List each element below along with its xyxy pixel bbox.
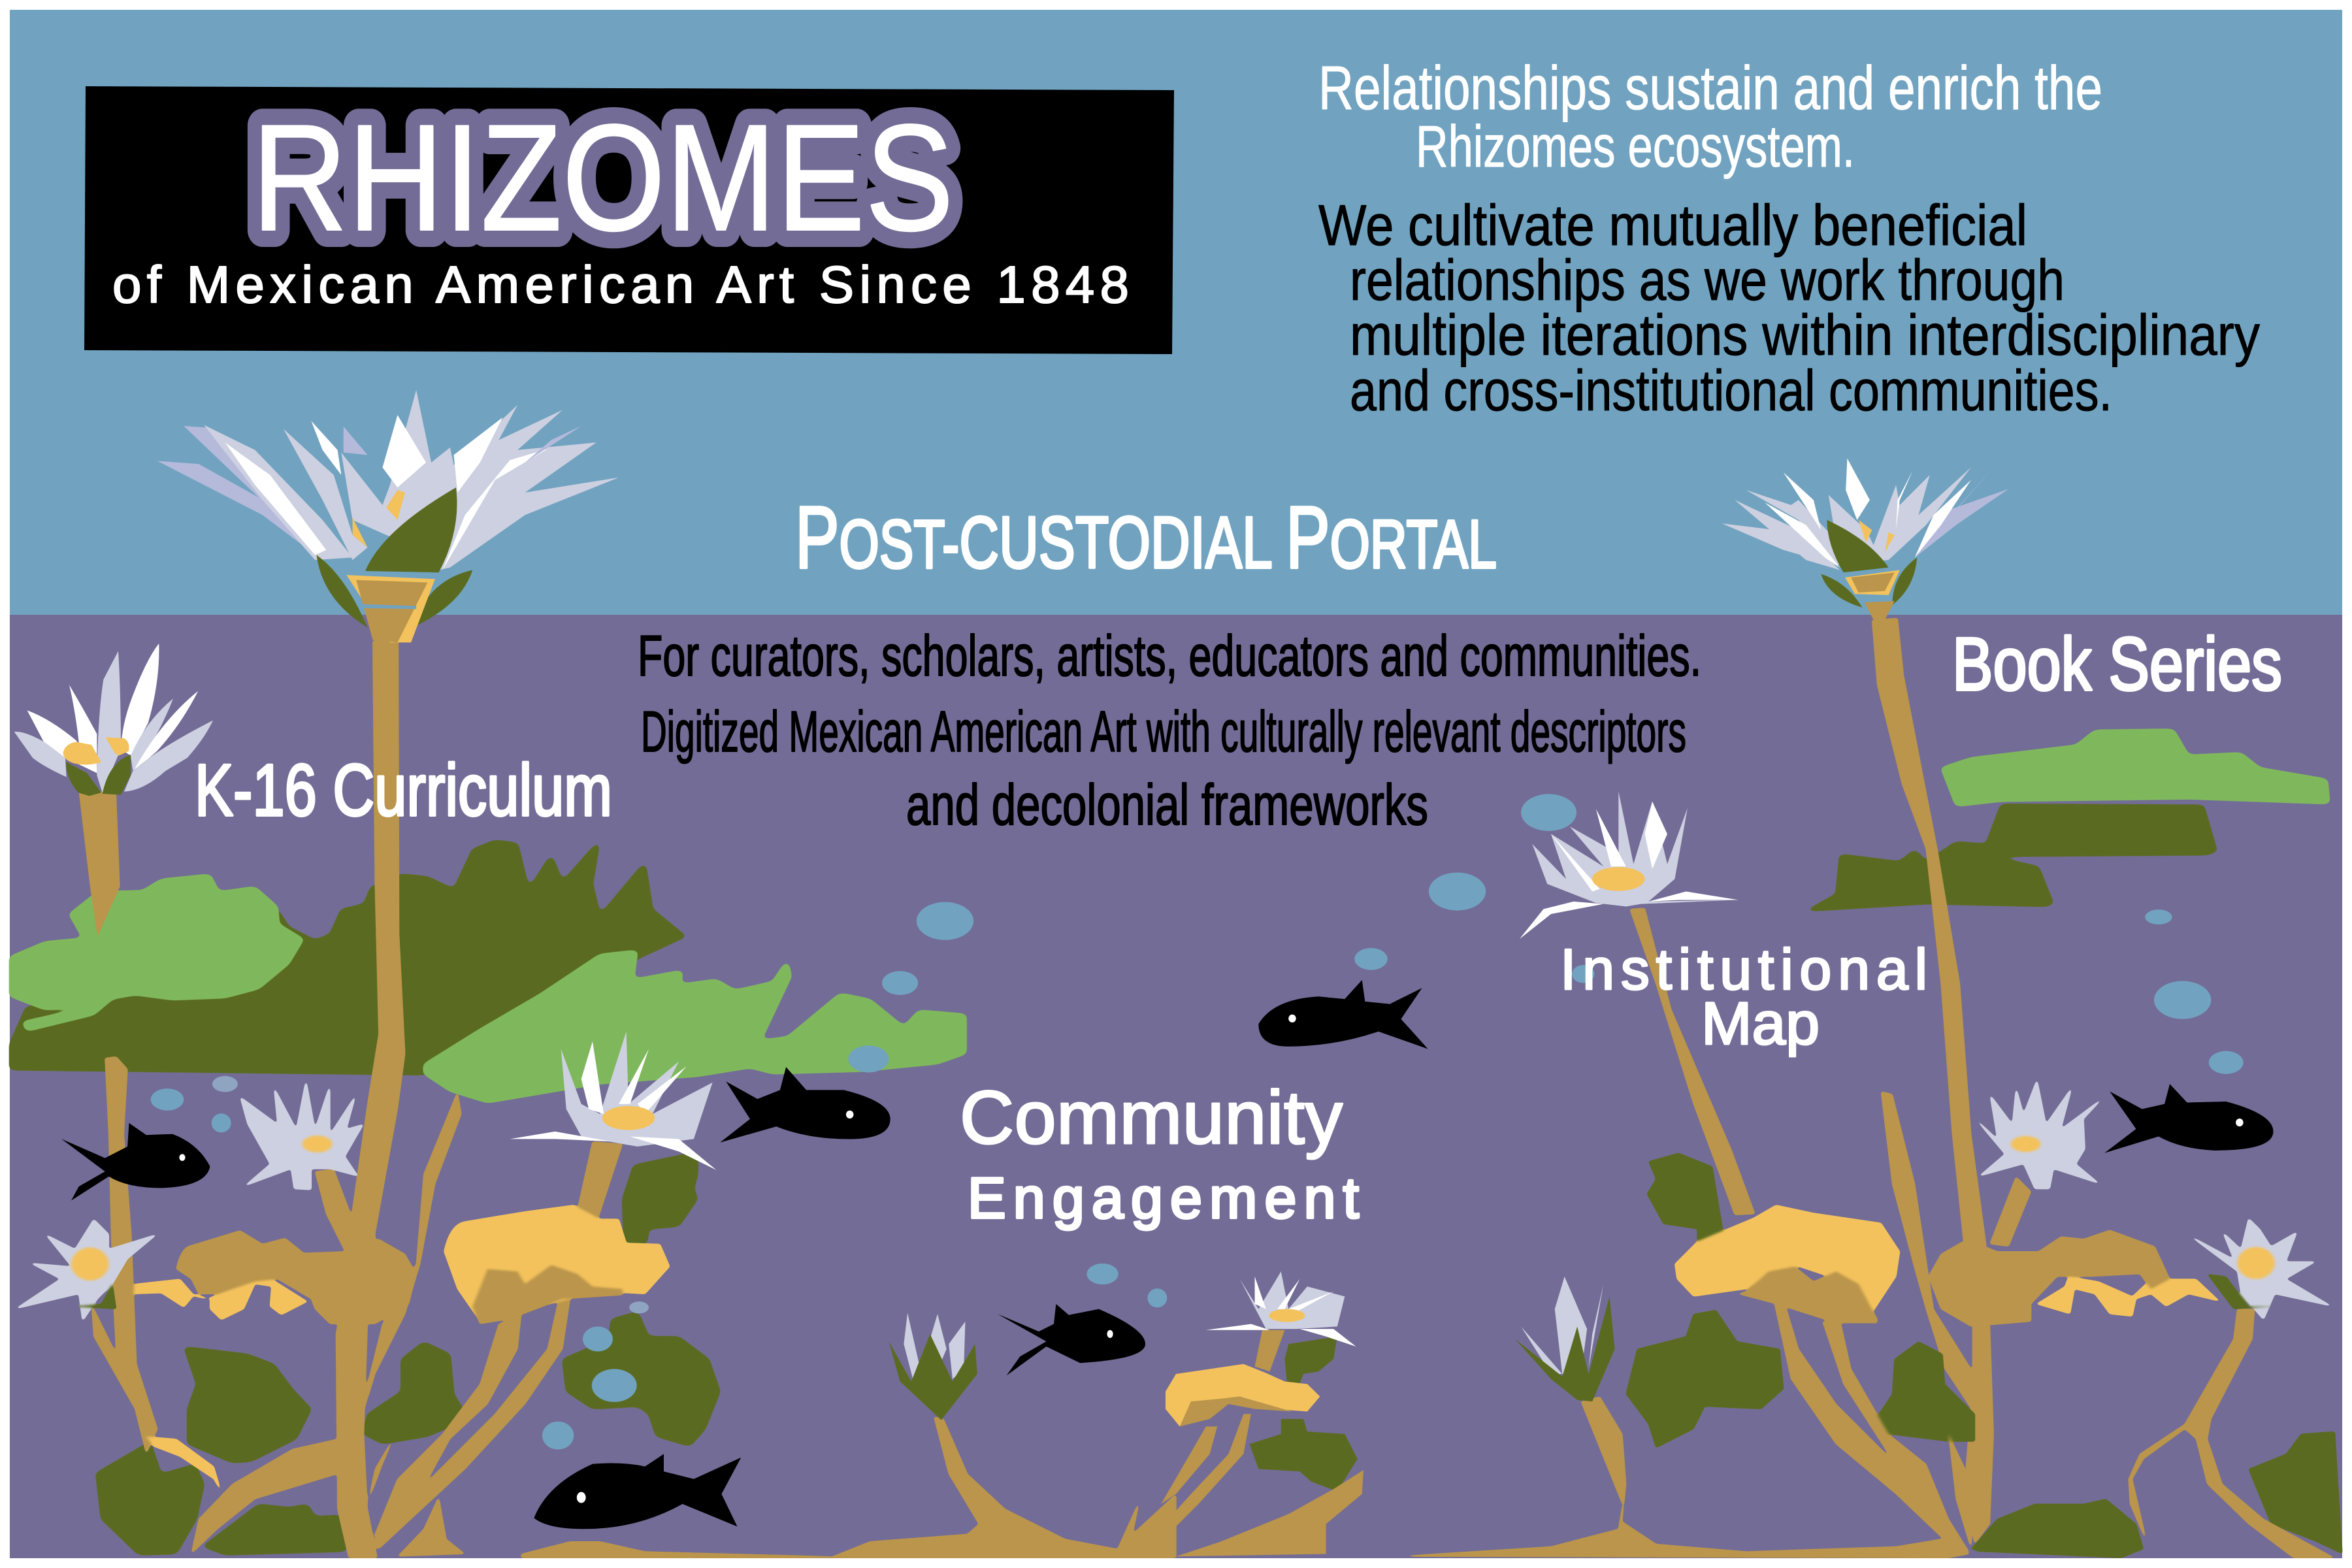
icon: white lily on yellow pad [510,1032,716,1170]
text block: portal description: and decolonial frameworks [906,772,1428,837]
label: community engagement: Community [960,1076,1343,1160]
plant: right tan pad and yellow ribbon [1928,1177,2335,1558]
icon: bud centre [889,1313,977,1420]
plant: right tall lily stem [1872,618,1993,1544]
fish: upper centre [1258,980,1428,1049]
icon: lily top right [1722,459,2008,620]
text block: cultivate relationships [1318,193,2260,423]
heading: post-custodial portal: POST-CUSTODIAL PORTAL [795,488,1497,587]
icon: small lily upper left [14,644,213,796]
text block: portal description [638,623,1701,837]
fish: near lily [720,1067,890,1143]
text block: relationships statement: Relationships sustain and enrich the [1318,54,2102,123]
text block: cultivate relationships: multiple iterations within interdisciplinary [1350,302,2260,367]
icon: lilac lily near stem [240,1079,364,1190]
plant: right pad and leaves [1394,908,2342,1558]
icon: bud right [1515,1277,1615,1401]
text block: cultivate relationships: and cross-institutional communities. [1350,358,2112,423]
bubbles: right [1354,794,2244,1074]
plants: left lagoon leaves [10,791,966,1103]
label: institutional map: Institutional [1560,937,1927,1002]
fish: bottom centre [998,1304,1145,1375]
title banner: RHIZOMES [252,93,954,263]
label: book series: Book Series [1952,623,2282,706]
plant: small lily and pad bottom centre [1146,1271,1364,1556]
icon: lilac lily right [1971,1079,2104,1189]
title banner: of Mexican American Art Since 1848 [112,255,1129,314]
plant: left bottom leaves [96,1151,720,1555]
text block: cultivate relationships: relationships as we work through [1350,248,2065,312]
fish: right [2104,1084,2274,1153]
text block: portal description: Digitized Mexican American Art with culturally relevant descriptors [641,699,1686,764]
label: community engagement [960,1076,1359,1230]
text block: relationships statement: Rhizomes ecosystem. [1416,114,1855,180]
text block: portal description: For curators, scholars, artists, educators and communities. [638,623,1701,688]
label: community engagement: Engagement [968,1166,1359,1230]
bubbles on dark leaf [583,1301,649,1402]
bubbles: left and centre [151,902,1167,1450]
plant: left main stems and pads [91,640,1176,1558]
text block: relationships statement [1318,54,2102,180]
label: institutional map [1560,937,1927,1057]
fish: large bottom [534,1454,741,1529]
icon: small lily far left [15,1219,157,1322]
icon: large lily top left [157,390,619,642]
text block: cultivate relationships: We cultivate mutually beneficial [1318,193,2027,257]
fish: left [61,1123,210,1200]
icon: white lily centre right [1520,791,1739,939]
title banner [84,86,1174,354]
label: k-16 curriculum: K-16 Curriculum [195,749,612,831]
plant: right upper leaves [1805,729,2330,911]
label: institutional map: Map [1701,990,1820,1057]
icon: small lily far right [2187,1218,2332,1320]
title banner: RHIZOMES [252,93,954,263]
